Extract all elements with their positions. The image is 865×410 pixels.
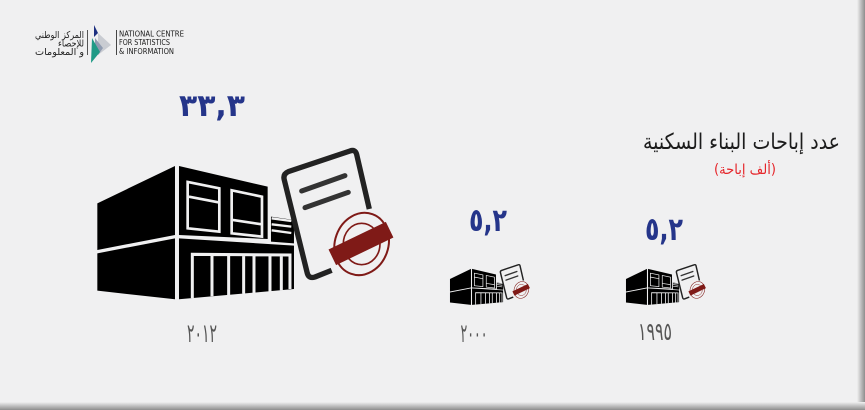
logo: English name	[119, 30, 184, 56]
logo: Arabic name: المركز الوطني	[35, 30, 84, 41]
year 2012: ٢٠١٢	[187, 319, 217, 349]
logo: Arabic divider	[87, 30, 88, 55]
column: 1995	[626, 210, 707, 346]
column: 2000: ٢٠٠٠	[460, 319, 488, 349]
icon: building with stamped permit, large	[97, 150, 398, 299]
frame shadow: bottom edge	[0, 402, 865, 410]
heading: عدد إباحات البناء السكنية	[643, 130, 840, 155]
logo: English name: & INFORMATION	[119, 47, 174, 56]
logo: English name: FOR STATISTICS	[119, 38, 170, 47]
logo: Arabic name	[35, 30, 84, 58]
frame shadow: right edge	[857, 0, 865, 410]
logo	[35, 25, 184, 63]
column: 2000	[450, 201, 531, 349]
year 1995: ١٩٩٥	[638, 317, 672, 346]
icon: building with stamped permit, small	[450, 265, 531, 305]
subheading: unit: (ألف إباحة)	[714, 160, 776, 178]
logo: Arabic name: للإحصاء	[58, 38, 84, 50]
icon: building with stamped permit, small	[626, 265, 707, 305]
value 2012: ٣٣,٣	[179, 88, 245, 124]
column: 2012	[97, 88, 398, 349]
value 2000: ٥,٢	[469, 201, 507, 239]
logo: English divider	[116, 30, 117, 55]
logo: Arabic name: و المعلومات	[35, 47, 84, 58]
value 1995: ٥,٢	[645, 210, 683, 248]
logo: English name: NATIONAL CENTRE	[119, 30, 184, 38]
logo: mark	[91, 25, 111, 63]
